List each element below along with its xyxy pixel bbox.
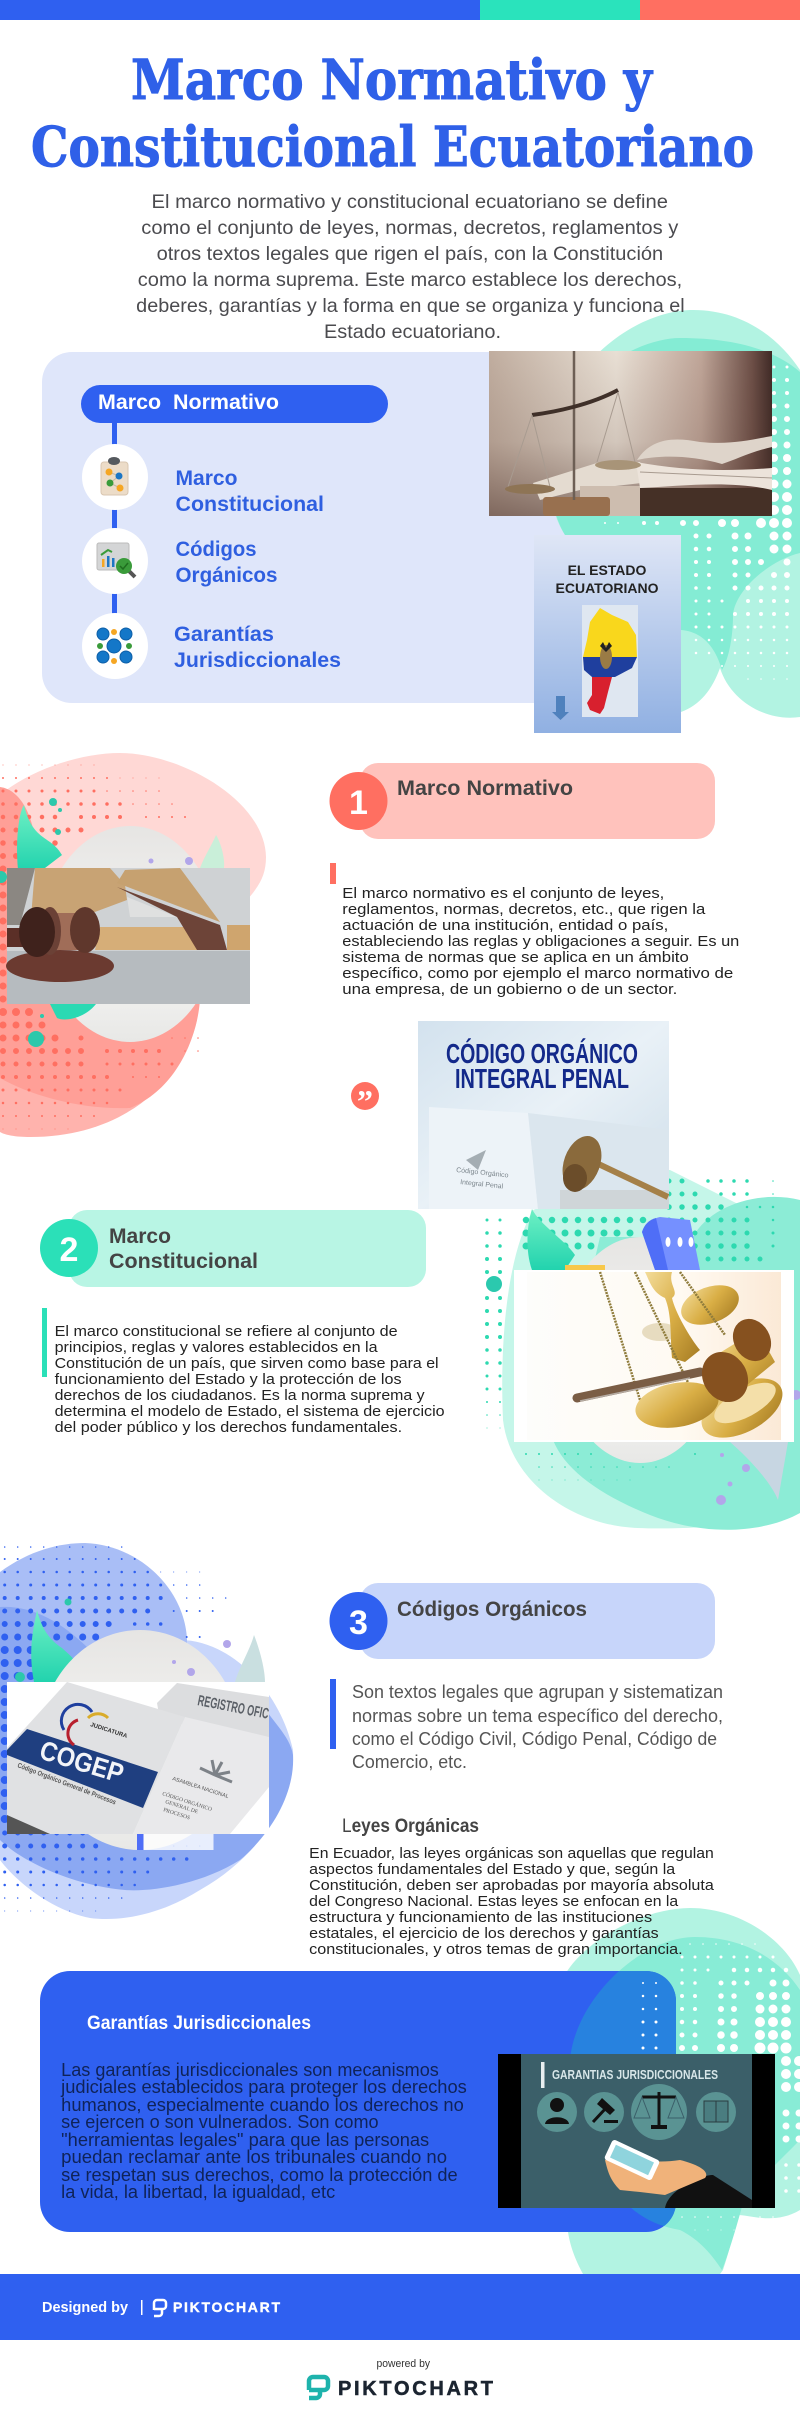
top colour bar bbox=[0, 0, 800, 20]
photo: COGEP documents: CÓDIGO ORGÁNICO bbox=[161, 1789, 213, 1813]
photo: scales and book bbox=[489, 351, 772, 516]
logo: piktochart: PIKTOCHART bbox=[338, 2378, 493, 2400]
intro paragraph: otros textos legales que rigen el país, con la Constitución bbox=[157, 243, 663, 265]
label: Garantías Jurisdiccionales bbox=[174, 623, 341, 672]
text block: marco normativo: específico, como por ejemplo el marco normativo de bbox=[342, 966, 733, 982]
photo: COGEP documents: PROCESOS bbox=[162, 1807, 191, 1822]
text block: marco normativo: estableciendo las reglas y obligaciones a seguir. Es un bbox=[342, 934, 739, 950]
footer band bbox=[0, 2274, 800, 2340]
intro paragraph: deberes, garantías y la forma en que se organiza y funciona el bbox=[136, 295, 685, 317]
decorative blue blob section 3 bbox=[0, 1543, 293, 1919]
panel text bbox=[60, 2060, 467, 2202]
header bar bbox=[360, 1583, 715, 1659]
accent tick section 1 bbox=[330, 863, 336, 884]
text block: marco normativo: reglamentos, normas, decretos, etc., que rigen la bbox=[342, 902, 706, 918]
intro paragraph: como la norma suprema. Este marco establece los derechos, bbox=[138, 269, 682, 291]
photo: Código Orgánico Integral Penal: INTEGRAL PENAL bbox=[455, 1063, 629, 1094]
text block: leyes orgánicas: Constitución, deben ser aprobadas por mayoría absoluta bbox=[309, 1878, 715, 1894]
panel: garantías jurisdiccionales bbox=[40, 1971, 676, 2232]
label: Garantías Jurisdiccionales: Garantías bbox=[174, 623, 274, 646]
section 1 heading bbox=[330, 763, 715, 839]
icon: quote badge: ” bbox=[357, 1083, 373, 1119]
text block: leyes orgánicas: estatales, el ejercicio de los derechos y garantías bbox=[309, 1926, 659, 1942]
text block: marco constitucional: derechos de los ciudadanos. Es la norma suprema y bbox=[55, 1388, 425, 1404]
photo: COGEP documents bbox=[7, 1682, 270, 1834]
panel text: Las garantías jurisdiccionales son mecanismos bbox=[61, 2060, 439, 2080]
panel text: judiciales establecidos para proteger los derechos bbox=[60, 2077, 467, 2097]
heading text: Marco Normativo bbox=[397, 777, 573, 800]
text block: marco normativo: actuación de una institución, entidad o país, bbox=[342, 918, 668, 934]
label: Marco Constitucional bbox=[176, 467, 324, 516]
icon: quote badge bbox=[351, 1082, 379, 1119]
photo: Código Orgánico Integral Penal: CÓDIGO ORGÁNICO bbox=[446, 1038, 638, 1069]
decorative pink blob section 1 bbox=[0, 753, 266, 1137]
text block: marco constitucional bbox=[55, 1324, 445, 1436]
intro paragraph: El marco normativo y constitucional ecuatoriano se define bbox=[152, 191, 668, 213]
powered by: powered by bbox=[376, 2358, 430, 2370]
accent tick section 3 bbox=[330, 1679, 336, 1749]
text block: códigos orgánicos: Son textos legales que agrupan y sistematizan bbox=[352, 1682, 723, 1702]
overview list bbox=[81, 385, 388, 679]
number badge 2 bbox=[40, 1219, 98, 1277]
photo: gavel and book bbox=[6, 868, 250, 1004]
panel text: se respetan sus derechos, como la protección de bbox=[61, 2165, 458, 2185]
decorative teal blob section 2 bbox=[486, 1170, 800, 1530]
text block: marco constitucional: determina el modelo de Estado, el sistema de ejercicio bbox=[55, 1404, 445, 1420]
header bar bbox=[69, 1210, 426, 1287]
label: Marco Constitucional: Marco bbox=[176, 467, 238, 490]
text block: códigos orgánicos: como el Código Civil, Código Penal, Código de bbox=[352, 1729, 717, 1749]
text block: marco constitucional: El marco constitucional se refiere al conjunto de bbox=[55, 1324, 398, 1340]
intro paragraph: Estado ecuatoriano. bbox=[324, 321, 501, 343]
photo: El Estado Ecuatoriano map: ECUATORIANO bbox=[556, 580, 659, 596]
text block: leyes orgánicas: constitucionales, y otros temas de gran importancia. bbox=[309, 1942, 683, 1958]
photo: golden gavel and scales bbox=[514, 1270, 794, 1450]
list connector bbox=[112, 423, 117, 648]
photo: Código Orgánico Integral Penal: Integral Penal bbox=[460, 1179, 504, 1191]
text block: leyes orgánicas: aspectos fundamentales del Estado y que, según la bbox=[309, 1862, 676, 1878]
panel: marco normativo overview background bbox=[42, 352, 592, 703]
photo: El Estado Ecuatoriano map bbox=[534, 535, 681, 733]
label: Códigos Orgánicos: Códigos bbox=[176, 538, 256, 561]
text block: leyes orgánicas: En Ecuador, las leyes orgánicas son aquellas que regulan bbox=[309, 1846, 714, 1862]
panel text: puedan reclamar ante los tribunales cuando no bbox=[61, 2147, 447, 2167]
label: Garantías Jurisdiccionales: Jurisdiccionales bbox=[174, 649, 341, 672]
label: Marco Constitucional: Constitucional bbox=[176, 493, 324, 516]
decorative teal blob bottom bbox=[560, 1908, 800, 2274]
subheading: Leyes Orgánicas: Leyes Orgánicas bbox=[342, 1816, 479, 1837]
text block: códigos orgánicos: normas sobre un tema específico del derecho, bbox=[352, 1706, 723, 1726]
halftone white dots bottom right bbox=[643, 1944, 799, 2230]
photo: garantías jurisdiccionales slide bbox=[498, 2054, 775, 2208]
photo: COGEP documents: REGISTRO OFIC bbox=[196, 1692, 270, 1723]
photo: Código Orgánico Integral Penal: Código Orgánico bbox=[456, 1167, 509, 1179]
text block: marco normativo: El marco normativo es el conjunto de leyes, bbox=[342, 886, 664, 902]
number badge 1: 1 bbox=[349, 784, 368, 822]
panel text: "herramientas legales" para que las personas bbox=[61, 2130, 429, 2150]
photo: COGEP documents: COGEP bbox=[36, 1735, 127, 1789]
icon: network of people bbox=[82, 613, 148, 679]
heading text: Constitucional bbox=[109, 1250, 258, 1273]
text block: leyes orgánicas bbox=[309, 1846, 715, 1958]
panel text: se ejercen o son vulnerados. Son como bbox=[61, 2112, 379, 2132]
text block: marco normativo bbox=[342, 886, 739, 998]
number badge 3 bbox=[330, 1592, 388, 1650]
icon: clipboard diagram bbox=[82, 444, 148, 510]
number badge 3: 3 bbox=[349, 1604, 368, 1642]
photo: COGEP documents: Código Orgánico General de Procesos bbox=[16, 1762, 117, 1807]
heading text: Marco bbox=[109, 1225, 171, 1248]
photo: COGEP documents: JUDICATURA bbox=[89, 1722, 129, 1740]
designed by: Designed by bbox=[42, 2299, 129, 2316]
intro paragraph: como el conjunto de leyes, normas, decretos, reglamentos y bbox=[141, 217, 679, 239]
decorative teal blob top right bbox=[545, 310, 800, 718]
photo: garantías jurisdiccionales slide: GARANTIAS JURISDICCIONALES bbox=[552, 2067, 718, 2082]
photo: Código Orgánico Integral Penal bbox=[418, 1021, 669, 1209]
photo: El Estado Ecuatoriano map: EL ESTADO bbox=[568, 562, 647, 578]
panel heading: Garantías Jurisdiccionales bbox=[87, 2013, 311, 2034]
text block: marco constitucional: Constitución de un país, que sirven como base para el bbox=[55, 1356, 439, 1372]
number badge 2: 2 bbox=[60, 1231, 78, 1269]
pill heading: Marco Normativo bbox=[81, 385, 388, 423]
text block: códigos orgánicos bbox=[352, 1682, 723, 1772]
section 2 heading bbox=[40, 1210, 426, 1287]
text block: marco constitucional: funcionamiento del Estado y la protección de los bbox=[55, 1372, 402, 1388]
pill heading: Marco Normativo: Marco Normativo bbox=[98, 391, 279, 414]
panel text: la vida, la libertad, la igualdad, etc bbox=[61, 2182, 335, 2202]
text block: leyes orgánicas: estructura y funcionamiento de las instituciones bbox=[309, 1910, 652, 1926]
number badge 1 bbox=[330, 772, 388, 830]
header bar bbox=[360, 763, 715, 839]
label: Códigos Orgánicos bbox=[176, 538, 278, 587]
title: Marco Normativo y bbox=[131, 47, 654, 112]
heading text: Códigos Orgánicos bbox=[397, 1598, 587, 1621]
photo: COGEP documents: GENERAL DE bbox=[164, 1799, 199, 1816]
text block: marco constitucional: del poder público y los derechos fundamentales. bbox=[55, 1420, 402, 1436]
title bbox=[31, 47, 754, 179]
text block: leyes orgánicas: del Congreso Nacional. Estas leyes se enfocan en la bbox=[309, 1894, 679, 1910]
text block: marco constitucional: principios, reglas y valores establecidos en la bbox=[55, 1340, 379, 1356]
intro paragraph bbox=[136, 191, 685, 343]
accent tick section 2 bbox=[42, 1308, 47, 1377]
heading text bbox=[109, 1225, 258, 1273]
section 3 heading bbox=[330, 1583, 715, 1659]
logo: piktochart footer: PIKTOCHART bbox=[173, 2299, 280, 2315]
label: Códigos Orgánicos: Orgánicos bbox=[176, 564, 278, 587]
text block: marco normativo: sistema de normas que se aplica en un ámbito bbox=[342, 950, 689, 966]
text block: códigos orgánicos: Comercio, etc. bbox=[352, 1752, 467, 1772]
panel text: humanos, especialmente cuando los derechos no bbox=[61, 2095, 464, 2115]
photo: COGEP documents: ASAMBLEA NACIONAL bbox=[171, 1776, 229, 1800]
text block: marco normativo: una empresa, de un gobierno o de un sector. bbox=[342, 982, 677, 998]
icon: chart with magnifier bbox=[82, 528, 148, 594]
